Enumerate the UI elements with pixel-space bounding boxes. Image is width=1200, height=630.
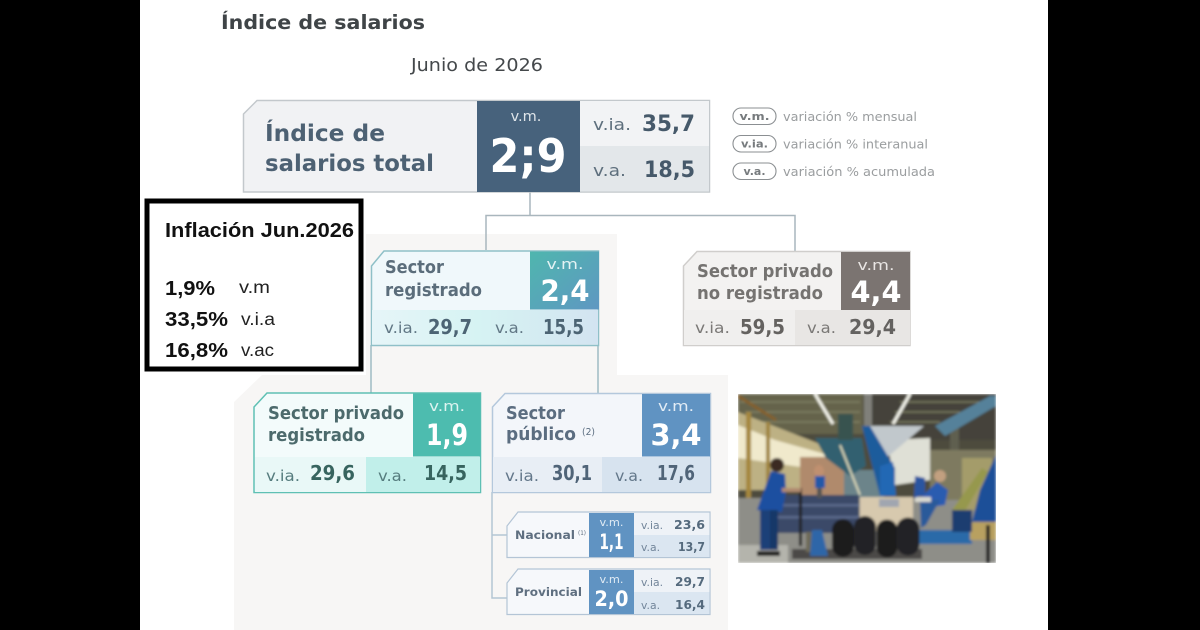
connector lines: tree <box>371 192 795 598</box>
value box: v.m. no registrado <box>841 252 910 310</box>
value box: v.m. público: 3,4 <box>650 418 702 452</box>
value: v.ia. total: 35,7 <box>642 112 695 137</box>
value box: v.m. total: 2;9 <box>490 129 566 183</box>
heading: Sector registrado <box>385 258 482 301</box>
values row: no registrado: v.ia. <box>695 319 730 337</box>
value box: v.m. registrado: v.m. <box>546 257 584 273</box>
legend: v.m.: variación % mensual <box>783 110 917 124</box>
panel: Sector privado no registrado <box>684 252 910 346</box>
callout: inflación: 33,5% <box>165 308 228 331</box>
value box: v.m. privado registrado: 1,9 <box>426 418 468 452</box>
values: Nacional: 13,7 <box>678 539 705 554</box>
panel: Sector registrado <box>372 251 599 346</box>
callout: inflación: Inflación Jun.2026 <box>165 219 354 242</box>
label: Nacional: Nacional <box>515 528 575 542</box>
legend: v.ia.: v.ia. <box>741 138 768 150</box>
value box: v.m. no registrado: v.m. <box>858 258 894 274</box>
value box: v.m. no registrado: 4,4 <box>850 275 902 309</box>
heading: privado registrado: registrado <box>268 426 365 446</box>
heading: total: Índice de <box>265 119 385 147</box>
value box: v.m. total <box>477 101 580 192</box>
legend <box>733 108 935 180</box>
heading: Sector público <box>506 404 595 445</box>
values: Provincial: v.a. <box>641 599 660 612</box>
callout: inflación: 1,9% <box>165 277 215 300</box>
legend: v.a. <box>733 163 935 180</box>
values row: público: 17,6 <box>657 461 695 485</box>
values: Provincial: 29,7 <box>675 574 705 589</box>
callout: inflación <box>147 201 361 369</box>
white page background <box>140 0 1048 630</box>
callout: inflación: 16,8% <box>165 339 228 362</box>
values: Nacional <box>634 513 710 557</box>
values row: público: v.ia. <box>505 467 539 485</box>
heading: total line 2: salarios total <box>265 151 434 177</box>
value box: v.m. Provincial <box>589 570 634 614</box>
values row: privado registrado: 14,5 <box>424 461 467 485</box>
heading: privado registrado: Sector privado <box>268 404 404 424</box>
heading: Sector registrado: registrado <box>385 281 482 301</box>
value box: v.m. Nacional: 1,1 <box>600 530 624 554</box>
values row: público: 30,1 <box>552 461 592 485</box>
values row: registrado: v.a. <box>495 319 524 337</box>
legend: v.a.: variación % acumulada <box>783 165 935 179</box>
panel: Sector público <box>492 394 710 492</box>
values row: privado registrado: v.a. <box>378 467 407 485</box>
values: Provincial: v.ia. <box>641 576 663 589</box>
values row: registrado: 29,7 <box>428 315 472 339</box>
callout: inflación: v.i.a <box>241 309 275 329</box>
values row: privado registrado: v.ia. <box>266 467 300 485</box>
legend: v.m.: v.m. <box>740 110 770 123</box>
values row: privado registrado <box>255 457 480 492</box>
heading: privado registrado <box>268 404 404 446</box>
value box: v.m. privado registrado: v.m. <box>429 399 465 415</box>
values row: privado registrado: 29,6 <box>310 461 355 485</box>
panel: Sector privado registrado <box>254 393 480 492</box>
value box: v.m. total: v.m. <box>511 109 541 125</box>
value: v.a. total: v.a. <box>593 161 626 180</box>
values row: registrado: 15,5 <box>543 315 584 339</box>
panel: Provincial <box>507 569 710 614</box>
values row: público <box>493 457 710 492</box>
value box: v.m. Nacional <box>589 513 634 557</box>
heading: Sector público: público <box>506 425 576 445</box>
panel: Índice de salarios total <box>244 100 710 192</box>
values row: registrado: v.ia. <box>384 319 418 337</box>
label: Provincial: Provincial <box>515 585 582 599</box>
values row: público: v.a. <box>615 467 643 485</box>
values: Provincial: 16,4 <box>675 597 705 612</box>
values: Nacional: v.a. <box>641 541 660 554</box>
callout: inflación: v.ac <box>241 340 274 360</box>
heading: no registrado: no registrado <box>697 284 823 304</box>
value box: v.m. Provincial: 2,0 <box>594 587 628 611</box>
value box: v.m. registrado: 2,4 <box>540 274 590 308</box>
panel: grey sector background <box>234 234 728 630</box>
legend: v.m. <box>733 108 917 124</box>
value box: v.m. privado registrado <box>413 394 480 456</box>
value: v.a. total: 18,5 <box>644 158 695 183</box>
legend: v.ia. <box>733 136 928 152</box>
value: v.ia. total <box>580 101 709 146</box>
value: v.ia. total: v.ia. <box>593 115 631 134</box>
heading: Sector público: (2) <box>582 427 595 438</box>
heading: Sector público: Sector <box>506 404 565 424</box>
value: v.a. total <box>580 146 709 192</box>
heading: Sector registrado: Sector <box>385 258 444 278</box>
black side bar: left <box>0 0 140 630</box>
value box: v.m. Provincial: v.m. <box>600 574 624 586</box>
black side bar: right <box>1048 0 1200 630</box>
values: Nacional: 23,6 <box>674 517 705 532</box>
photo: textile factory workers <box>738 394 996 563</box>
title: Índice de salarios <box>221 11 425 34</box>
callout: inflación: v.m <box>239 277 270 297</box>
values row: registrado <box>372 310 598 344</box>
value box: v.m. público <box>642 394 710 456</box>
value box: v.m. Nacional: v.m. <box>600 517 624 529</box>
value box: v.m. registrado <box>530 252 599 310</box>
heading: no registrado: Sector privado <box>697 262 833 282</box>
values row: no registrado: v.a. <box>807 319 836 337</box>
values row: no registrado: 59,5 <box>740 315 785 339</box>
values: Nacional: v.ia. <box>641 519 663 532</box>
values: Provincial <box>634 570 710 614</box>
label: Nacional: (1) <box>578 530 586 537</box>
value box: v.m. público: v.m. <box>658 399 694 415</box>
values row: no registrado: 29,4 <box>849 315 896 339</box>
panel: Nacional <box>507 512 710 558</box>
values row: no registrado <box>684 310 910 345</box>
heading: no registrado <box>697 262 833 304</box>
date heading: Junio de 2026 <box>410 56 543 76</box>
legend: v.ia.: variación % interanual <box>783 138 928 152</box>
legend: v.a.: v.a. <box>744 165 766 178</box>
